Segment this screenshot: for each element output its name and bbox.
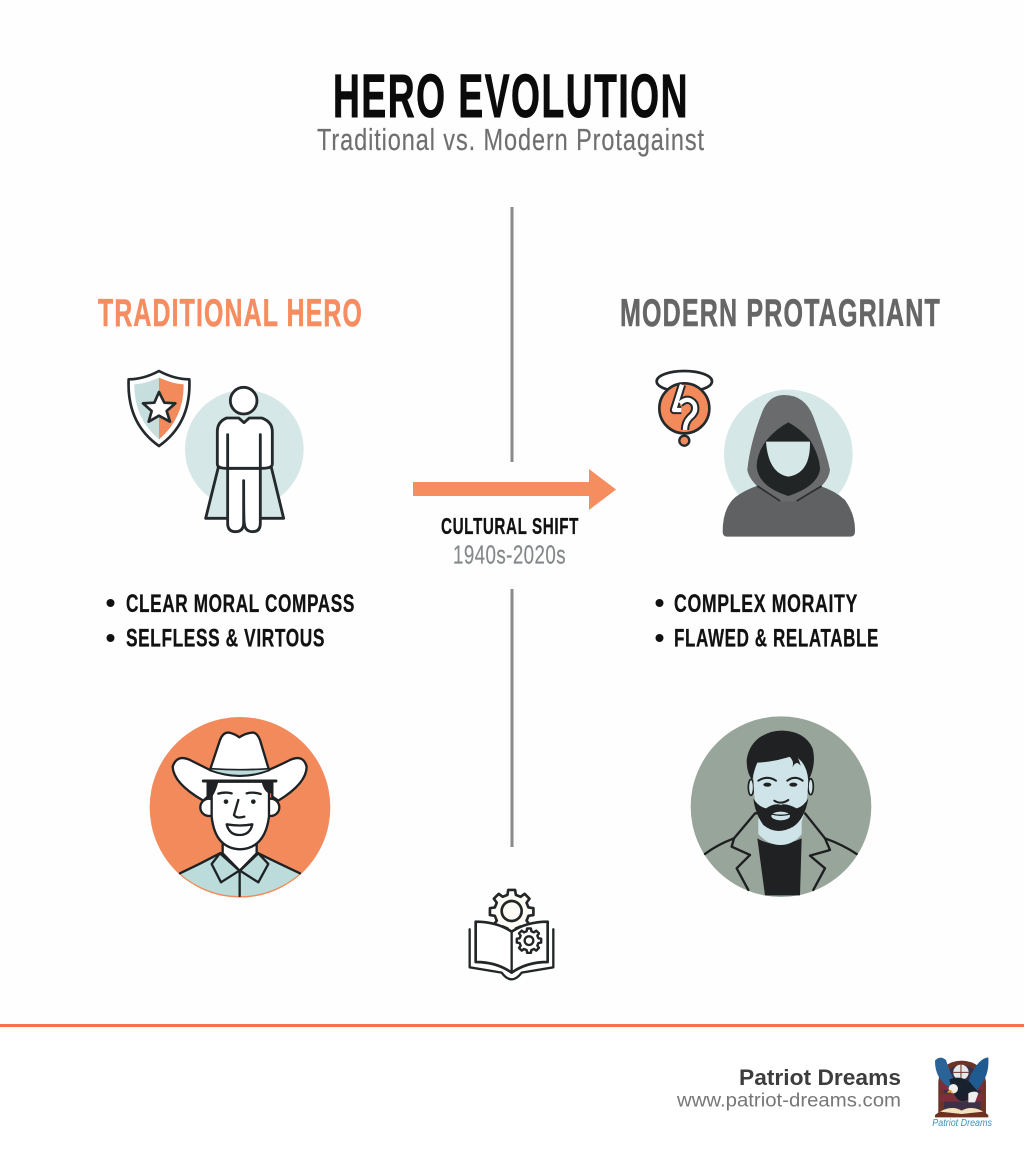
arrow: cultural shift — [413, 469, 616, 510]
list: traditional hero traits — [106, 590, 355, 652]
list: modern protagonist traits — [656, 590, 879, 652]
portrait: modern protagonist — [691, 716, 871, 897]
title: HERO EVOLUTION — [333, 62, 689, 130]
icon: question mark with halo — [657, 371, 712, 446]
subtitle: Traditional vs. Modern Protagainst — [317, 122, 705, 157]
center divider top — [510, 207, 514, 462]
heading: traditional hero: TRADITIONAL HERO — [98, 292, 363, 335]
logo: Patriot Dreams eagle and book — [932, 1057, 992, 1129]
portrait: cowboy — [150, 717, 330, 898]
label: cultural shift: CULTURAL SHIFT — [441, 513, 579, 539]
list: traditional hero traits: CLEAR MORAL COMPASS — [126, 590, 355, 618]
list: modern protagonist traits: FLAWED & RELATABLE — [674, 624, 879, 652]
footer rule — [0, 1024, 1024, 1027]
icon: shield with star — [129, 371, 189, 446]
list: traditional hero traits: SELFLESS & VIRTOUS — [126, 624, 325, 652]
logo: Patriot Dreams eagle and book: Patriot Dreams — [932, 1118, 992, 1129]
icon: hooded figure — [723, 390, 855, 537]
footer url: www.patriot-dreams.com — [676, 1090, 901, 1112]
icon: book with gears — [470, 890, 553, 979]
label: date range: 1940s-2020s — [453, 540, 566, 570]
list: modern protagonist traits: COMPLEX MORAITY — [674, 590, 858, 618]
footer brand name: Patriot Dreams — [739, 1065, 901, 1090]
icon: caped hero figure — [185, 387, 304, 532]
center divider bottom — [510, 589, 514, 847]
